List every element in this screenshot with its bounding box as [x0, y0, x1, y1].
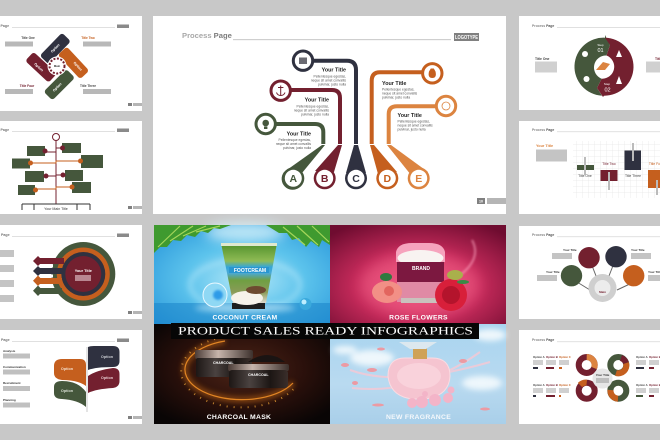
donuts	[579, 357, 626, 399]
palm leaves	[154, 225, 330, 253]
option tables: Option A	[636, 383, 648, 387]
option tables	[533, 355, 660, 387]
grid background	[573, 141, 660, 198]
tree nodes	[28, 146, 83, 192]
thumbnail: grid bars slide	[519, 121, 660, 214]
list items: Planning	[3, 398, 16, 402]
logotype badge	[454, 33, 479, 41]
option labels: Option	[73, 61, 83, 72]
charcoal jars: CHARCOAL	[213, 361, 234, 365]
label: rose flowers: ROSE FLOWERS	[389, 314, 448, 322]
cycle ring	[574, 35, 634, 97]
center disc	[592, 368, 612, 388]
branch D orange: money bag: D	[384, 173, 392, 185]
option tables: Option B	[546, 383, 558, 387]
thumbnail: tree slide: Page	[0, 128, 9, 132]
bubble titles: Your Title	[631, 248, 645, 252]
intro text: Your Title	[536, 144, 553, 148]
side body lines	[5, 42, 111, 94]
bubble titles: Your Title	[546, 270, 560, 274]
text block E	[398, 113, 433, 132]
text block A: Pellentesque egestas,	[279, 138, 311, 142]
side captions	[535, 57, 660, 72]
header rule	[233, 39, 451, 40]
pinwheel hub: Main	[54, 64, 60, 68]
floating petals	[341, 348, 490, 410]
roses and leaves	[372, 270, 469, 311]
leaf: option green	[54, 381, 86, 407]
text block D: pulvinar, justo nulla	[382, 96, 410, 100]
thumbnail: option pinwheel slide	[0, 16, 142, 111]
branch B red: anchor	[271, 81, 342, 189]
list items: Analysis	[3, 349, 16, 353]
pinwheel hub	[48, 56, 66, 76]
leaf: option navy: Option	[101, 355, 114, 359]
option tables: Option C	[559, 383, 571, 387]
cycle center icon	[596, 62, 610, 70]
thumbnail: bubbles and wheel slide	[519, 226, 660, 319]
list items	[3, 349, 30, 408]
concentric rings: Your Title	[75, 269, 92, 273]
text block C: neque sit amet convallis	[311, 78, 346, 82]
stem	[86, 347, 88, 412]
branch C navy: monitor: C	[352, 173, 360, 185]
rose jar	[396, 243, 445, 303]
step labels: Step	[597, 43, 604, 47]
thumbnail: option pinwheel slide: Page	[0, 24, 9, 28]
cycle icons	[582, 50, 622, 84]
side titles: Title Three	[80, 84, 96, 88]
rose jar: BRAND	[412, 266, 430, 272]
water spheres	[203, 283, 312, 310]
thumbnail: concentric circles slide	[0, 225, 142, 319]
list items: Communication	[3, 365, 26, 369]
side captions: Title One	[535, 57, 550, 61]
branch E light orange: clock: E	[415, 173, 422, 185]
text block D	[382, 81, 418, 100]
leaf: option red: Option	[101, 376, 114, 380]
text block D: neque sit amet convallis	[382, 92, 418, 96]
label: charcoal mask: CHARCOAL MASK	[207, 414, 271, 421]
leaf: option orange: Option	[61, 367, 74, 371]
tree trunk and branches	[22, 138, 90, 210]
side titles	[20, 36, 96, 88]
text block E: neque sit amet convallis	[398, 124, 433, 128]
thumbnail: bubbles and wheel slide: Process Page	[532, 233, 554, 237]
step labels: Step	[604, 82, 610, 86]
logotype badge: LOGOTYPE	[455, 35, 478, 41]
branch A green: lamp	[256, 114, 325, 190]
text block D: Your Title	[382, 81, 406, 87]
option tables: Option A	[533, 355, 545, 359]
pinwheel bars	[25, 33, 89, 100]
banner: product sales ready infographics	[171, 323, 479, 339]
step labels	[597, 43, 611, 94]
grid captions: Title One	[578, 174, 592, 178]
page number tag	[477, 198, 506, 204]
charcoal jars	[195, 350, 289, 388]
step bars	[38, 258, 64, 294]
petal swirl	[350, 352, 490, 389]
leaf: option red	[88, 368, 120, 393]
charcoal jars: CHARCOAL	[248, 373, 269, 377]
list items: Recruitment	[3, 381, 21, 385]
option tables: Option A	[533, 383, 545, 387]
branch E light orange: clock	[387, 96, 456, 189]
wheel: Main	[599, 290, 606, 294]
thumbnail: donut options slide: Process Page	[532, 338, 554, 342]
text block A: Your Title	[287, 131, 311, 137]
text block E: Pellentesque egestas,	[398, 120, 430, 124]
center disc: Your Title	[596, 373, 610, 377]
clouds	[333, 329, 506, 390]
text block B: neque sit amet convallis	[294, 108, 329, 112]
text block B: Pellentesque egestas,	[297, 104, 329, 108]
text block E: pulvinar, justo nulla	[398, 128, 426, 132]
text block C: pulvinar, justo nulla	[318, 82, 346, 86]
text block B: pulvinar, justo nulla	[301, 112, 329, 116]
leaf: option navy	[88, 346, 120, 370]
text block A: pulvinar, justo nulla	[283, 146, 311, 150]
option tables: Option C	[559, 355, 571, 359]
text block C: Pellentesque egestas,	[314, 74, 346, 78]
branch A green: lamp: A	[290, 173, 298, 185]
bubble titles: Your Title	[563, 248, 577, 252]
wheel	[588, 274, 616, 302]
leaf: option orange	[54, 359, 86, 386]
option labels: Option	[33, 62, 44, 72]
grid captions	[578, 162, 660, 178]
thumbnail: step cycle slide: Process Page	[532, 24, 554, 28]
text block C	[311, 68, 346, 86]
branch D orange: money bag	[370, 64, 442, 189]
slide heading: Process Page: Process Page	[182, 31, 232, 40]
connectors	[577, 258, 634, 290]
label: coconut cream: COCONUT CREAM	[212, 314, 278, 322]
label: new fragrance: NEW FRAGRANCE	[386, 414, 451, 421]
step labels: 02	[604, 88, 611, 94]
top node	[52, 134, 60, 140]
text block B: Your Title	[305, 98, 329, 104]
panel: charcoal mask product	[154, 324, 330, 424]
option labels: Option	[50, 43, 61, 54]
option labels	[33, 43, 83, 93]
coconut tube	[221, 243, 277, 309]
page number tag: 10	[479, 200, 483, 204]
panel: coconut cream product	[154, 222, 330, 324]
panel: rose flowers product	[330, 225, 506, 324]
option meters	[533, 360, 659, 397]
grid captions: Title Two	[602, 162, 616, 166]
perfume bottle	[388, 342, 450, 399]
bubbles	[561, 246, 644, 286]
text block E: Your Title	[398, 113, 422, 119]
text block A	[276, 131, 311, 150]
panel: main process slide	[153, 16, 506, 214]
banner: product sales ready infographics: PRODUCT SALES READY INFOGRAPHICS	[178, 324, 473, 338]
branch C navy: monitor	[293, 51, 367, 189]
thumbnail: leaves slide	[0, 330, 142, 424]
option tables: Option B	[546, 355, 558, 359]
cherry blossoms	[407, 386, 454, 408]
bubble titles	[537, 248, 660, 281]
text block D: Pellentesque egestas,	[382, 88, 415, 92]
thumbnail: tree slide	[0, 121, 142, 214]
branch B red: anchor: B	[321, 173, 329, 185]
thumbnail: concentric circles slide: Page	[1, 233, 10, 237]
thumbnail: donut options slide	[519, 330, 660, 424]
option tables: Option A	[636, 355, 648, 359]
text block B	[294, 98, 329, 116]
step hexagons	[33, 256, 43, 296]
tree title: Your Main Title	[44, 207, 68, 211]
concentric rings	[51, 242, 115, 306]
grid bars	[577, 143, 660, 195]
glowing orange ring	[181, 339, 296, 407]
green title boxes	[12, 143, 103, 195]
panel: new fragrance product	[330, 324, 506, 424]
thumbnail: grid bars slide: Process Page	[532, 128, 554, 132]
side titles: Title One	[21, 36, 35, 40]
step labels: 01	[597, 48, 604, 54]
grid captions: Title Three	[625, 174, 641, 178]
left side list	[0, 250, 14, 302]
coconut tube: FOOTCREAM	[234, 268, 266, 274]
intro text	[536, 144, 567, 162]
leaf: option green: Option	[61, 389, 74, 393]
option labels: Option	[52, 82, 63, 93]
thumbnail: leaves slide: Page	[1, 338, 10, 342]
side titles: Title Two	[81, 36, 95, 40]
side titles: Title Four	[20, 84, 35, 88]
text block A: neque sit amet convallis	[276, 142, 311, 146]
thumbnail: step cycle slide	[519, 16, 660, 110]
text block C: Your Title	[322, 68, 346, 74]
